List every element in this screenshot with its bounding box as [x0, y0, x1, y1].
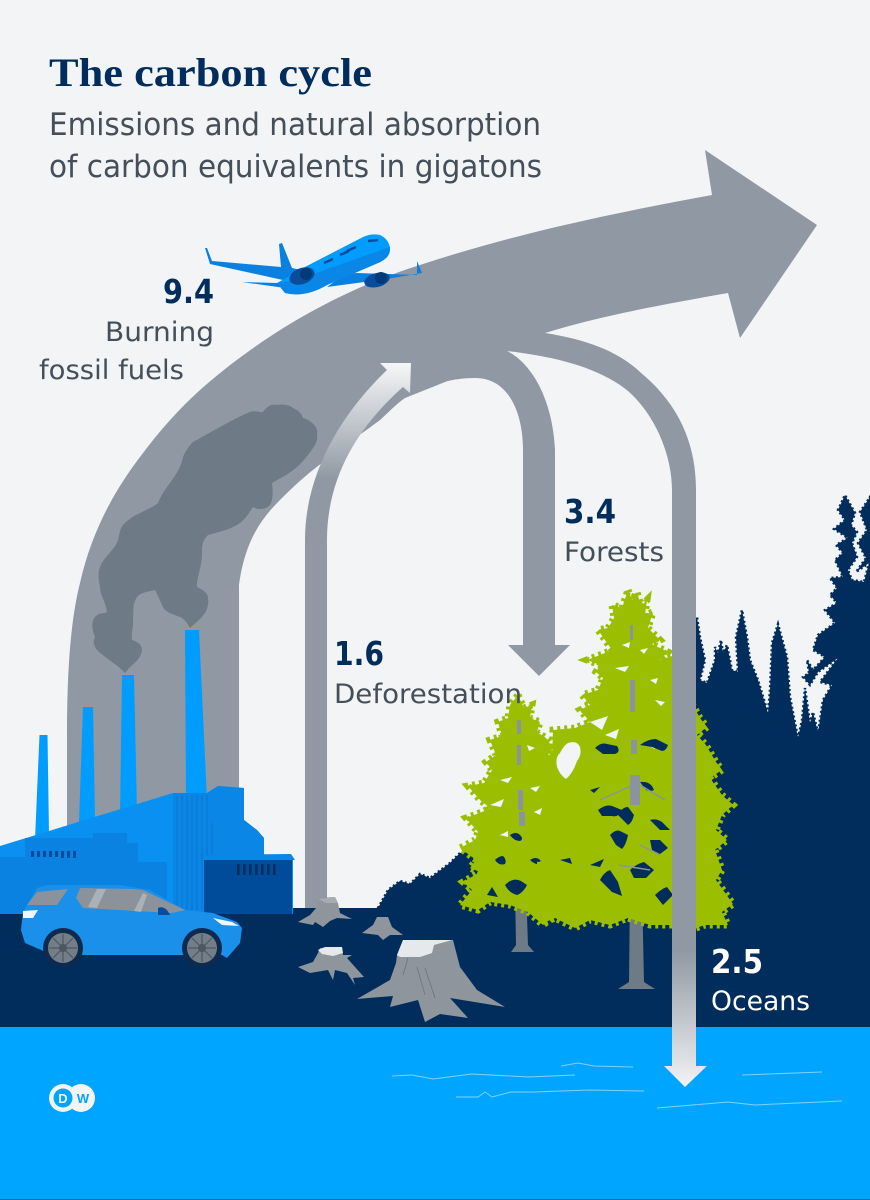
DW logo: D	[58, 1091, 68, 1106]
water	[0, 1027, 870, 1200]
label: forests: 3.4	[564, 492, 616, 531]
arrow: total emissions	[67, 150, 817, 830]
stump 2	[362, 917, 403, 940]
tree: large fir	[540, 590, 733, 989]
stump tops	[318, 940, 452, 957]
large stump	[357, 940, 505, 1022]
label: forests: Forests	[564, 537, 664, 568]
arrow: oceans absorption	[500, 333, 707, 1087]
factory	[0, 630, 295, 914]
low block	[204, 860, 292, 914]
label: burning fossil fuels: 9.4	[163, 272, 214, 311]
tree: small fir	[460, 695, 590, 952]
label: deforestation: 1.6	[334, 634, 384, 673]
label: oceans: Oceans	[711, 986, 810, 1017]
icon: airplane	[205, 234, 422, 294]
gap between trees	[556, 742, 581, 779]
smoke	[92, 405, 317, 673]
stump 3	[298, 947, 364, 985]
title: The carbon cycle	[49, 50, 372, 95]
DW logo: W	[77, 1091, 90, 1106]
forest silhouette	[378, 495, 870, 1030]
label: deforestation	[334, 634, 522, 710]
DW logo	[49, 1084, 95, 1112]
subtitle: of carbon equivalents in gigatons	[49, 149, 542, 185]
label: deforestation: Deforestation	[334, 679, 522, 710]
arrow: forests absorption	[405, 340, 570, 676]
subtitle: Emissions and natural absorption	[49, 107, 541, 143]
label: burning fossil fuels: Burning	[105, 317, 214, 348]
subtitle	[49, 107, 542, 185]
arrow: deforestation	[305, 363, 411, 912]
water ripples	[392, 1063, 842, 1108]
ground	[0, 908, 870, 1028]
label: oceans	[711, 942, 810, 1017]
label: burning fossil fuels: fossil fuels	[39, 355, 184, 386]
tree stumps	[298, 897, 505, 1022]
chimneys	[35, 630, 207, 840]
label: oceans: 2.5	[711, 942, 763, 981]
main building	[0, 786, 293, 914]
label: forests	[564, 492, 664, 568]
car	[21, 885, 242, 968]
label: burning fossil fuels	[39, 272, 214, 386]
stump 1	[298, 897, 352, 927]
